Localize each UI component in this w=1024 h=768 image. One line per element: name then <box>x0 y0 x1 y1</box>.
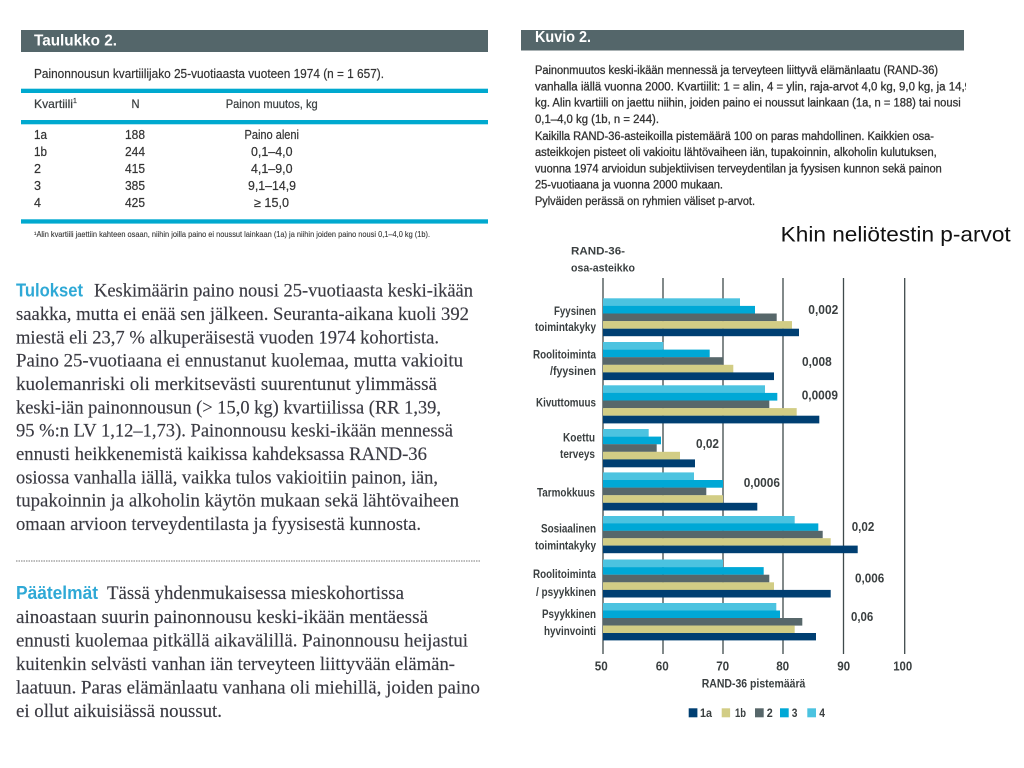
table row 2 <box>34 162 293 176</box>
heading: Tulokset: Tulokset <box>16 280 83 300</box>
conclusions paragraph: laatuun. Paras elämänlaatu vanhana oli miehillä, joiden paino <box>16 678 480 698</box>
panel: figure 2 heading bar: Kuvio 2. <box>535 29 591 46</box>
group: Roolitoiminta / fyysinen <box>533 342 832 380</box>
group: Kivuttomuus <box>536 385 838 423</box>
table row 3: 385 <box>125 179 145 193</box>
figure description: Painonmuutos keski-ikään mennessä ja terveyteen liittyvä elämänlaatu (RAND-36) <box>535 65 938 77</box>
group: Psyykkinen hyvinvointi: Psyykkinen <box>542 609 596 621</box>
group: Sosiaalinen toimintakyky: Sosiaalinen <box>541 524 596 536</box>
conclusions paragraph: kuitenkin selvästi vanhan iän terveyteen liittyvään elämän- <box>16 655 455 675</box>
group: Roolitoiminta / psyykkinen <box>533 560 884 599</box>
table row 3: 3 <box>34 179 41 193</box>
table footnote: ¹Alin kvartiili jaettiin kahteen osaan, niihin joilla paino ei noussut lainkaan (1a) ja niihin joiden paino nousi 0,1–4,0 kg (1b). <box>34 230 430 239</box>
table row 1a <box>34 128 299 142</box>
bar chart: RAND-36 scores <box>533 245 912 720</box>
group: Roolitoiminta / psyykkinen: 0,006 <box>855 572 884 586</box>
group: Psyykkinen hyvinvointi: 0,06 <box>851 610 873 624</box>
table row 1b <box>34 145 293 159</box>
x axis tick labels: 50 <box>595 658 608 673</box>
table row 4 <box>34 196 289 210</box>
legend: 2 <box>767 708 773 720</box>
figure description: vanhalla iällä vuonna 2000. Kvartiilit: 1 = alin, 4 = ylin, raja-arvot 4,0 kg, 9,0 kg, ja 14,9 <box>535 82 971 94</box>
table header row <box>34 97 318 111</box>
table rules <box>21 89 488 224</box>
group: Tarmokkuus: 0,0006 <box>744 476 780 490</box>
figure description: 25-vuotiaana ja vuonna 2000 mukaan. <box>535 180 723 192</box>
x axis tick labels: 100 <box>893 658 912 673</box>
table row 1a: Paino aleni <box>244 128 299 142</box>
table row 1b: 244 <box>125 145 145 159</box>
panel: table 2 <box>21 30 488 239</box>
x axis tick labels: 80 <box>776 658 789 673</box>
results paragraph: Keskimäärin paino nousi 25-vuotiaasta keski-ikään <box>94 282 473 302</box>
group: Fyysinen toimintakyky: toimintakyky <box>535 322 597 334</box>
figure description <box>535 65 971 208</box>
x axis tick labels: 90 <box>837 658 850 673</box>
group: Fyysinen toimintakyky: 0,002 <box>808 303 838 317</box>
table row 4: 4 <box>34 196 41 210</box>
table heading bar: Taulukko 2. <box>34 32 117 50</box>
table heading bar <box>21 30 488 52</box>
group: Sosiaalinen toimintakyky: toimintakyky <box>535 540 597 552</box>
group: Koettu terveys: 0,02 <box>696 437 719 451</box>
group: Koettu terveys: terveys <box>560 449 595 461</box>
group: Koettu terveys: Koettu <box>563 433 595 445</box>
group: Roolitoiminta / fyysinen: /fyysinen <box>550 366 596 378</box>
group: Sosiaalinen toimintakyky: 0,02 <box>852 520 874 534</box>
results paragraph: osiossa vanhalla iällä, vaikka tulos vakioitiin painon, iän, <box>16 468 438 488</box>
table header row: Painon muutos, kg <box>226 97 318 111</box>
results paragraph: 95 %:n LV 1,12–1,73). Painonnousu keski-ikään mennessä <box>16 422 453 442</box>
group: Fyysinen toimintakyky: Fyysinen <box>554 306 596 318</box>
x axis title: RAND-36 pistemäärä <box>702 679 806 691</box>
x axis tick labels <box>595 658 912 673</box>
results paragraph <box>16 282 473 535</box>
group: Psyykkinen hyvinvointi <box>542 603 873 640</box>
results paragraph: miestä eli 23,7 % alkuperäisestä vuoden 1974 kohortista. <box>16 328 439 348</box>
group: Koettu terveys <box>560 429 719 467</box>
table caption: Painonnousun kvartiilijako 25-vuotiaasta vuoteen 1974 (n = 1 657). <box>34 67 384 81</box>
table row 4: ≥ 15,0 <box>254 196 289 210</box>
figure description: 0,1–4,0 kg (1b, n = 244). <box>535 114 659 126</box>
results paragraph: Paino 25-vuotiaana ei ennustanut kuolemaa, mutta vakioitu <box>16 352 463 372</box>
group: Roolitoiminta / fyysinen: Roolitoiminta <box>533 350 597 362</box>
legend: 4 <box>819 708 826 720</box>
table row 2: 415 <box>125 162 145 176</box>
figure description: Pylväiden perässä on ryhmien väliset p-arvot. <box>535 196 755 208</box>
y axis title <box>571 245 635 275</box>
group: Tarmokkuus <box>537 472 780 510</box>
table row 1b: 1b <box>34 145 47 159</box>
table row 1b: 0,1–4,0 <box>251 145 293 159</box>
y axis title: osa-asteikko <box>571 263 635 275</box>
text block: Päätelmät <box>16 583 480 722</box>
group: Kivuttomuus: 0,0009 <box>802 388 838 402</box>
results paragraph: saakka, mutta ei enää sen jälkeen. Seuranta-aikana kuoli 392 <box>16 305 469 325</box>
legend: 1b <box>735 708 746 720</box>
results paragraph: tupakoinnin ja alkoholin käytön mukaan sekä lähtövaiheen <box>16 492 459 512</box>
heading: Päätelmät: Päätelmät <box>16 583 98 603</box>
group: Roolitoiminta / psyykkinen: / psyykkinen <box>536 587 596 599</box>
x axis tick labels: 70 <box>716 658 729 673</box>
results paragraph: omaan arvioon terveydentilasta ja fyysisestä kunnosta. <box>16 515 421 535</box>
results paragraph: ennusti heikkenemistä kaikissa kahdeksassa RAND-36 <box>16 445 427 465</box>
table row 1a: 1a <box>34 128 47 142</box>
table header row: 1 <box>73 98 77 105</box>
results paragraph: keski-iän painonnousun (> 15,0 kg) kvartiilissa (RR 1,39, <box>16 398 441 418</box>
group: Psyykkinen hyvinvointi: hyvinvointi <box>544 626 596 638</box>
conclusions paragraph: ei ollut aikuisiässä noussut. <box>16 702 222 722</box>
legend: 1a <box>700 708 713 720</box>
text block: Tulokset <box>16 280 473 535</box>
legend: 3 <box>792 708 797 720</box>
figure description: asteikkojen pisteet oli vakioitu lähtövaiheen iän, tupakoinnin, alkoholin kulutuksen, <box>535 147 937 159</box>
conclusions paragraph: ainoastaan suurin painonnousu keski-ikään mentäessä <box>16 608 428 628</box>
y axis title: RAND-36- <box>571 245 625 257</box>
results paragraph: kuolemanriski oli merkitsevästi suurentunut ylimmässä <box>16 375 437 395</box>
table header row: Kvartiili <box>34 97 73 111</box>
figure description: vuonna 1974 arvioidun subjektiivisen terveydentilan ja fyysisen kunnon sekä painon <box>535 164 942 176</box>
group: Roolitoiminta / psyykkinen: Roolitoiminta <box>533 569 597 581</box>
callout: Khin neliötestin p-arvot: Khin neliötestin p-arvot <box>781 222 1011 246</box>
group: Fyysinen toimintakyky <box>535 298 838 336</box>
table row 2: 2 <box>34 162 41 176</box>
conclusions paragraph: Tässä yhdenmukaisessa mieskohortissa <box>107 584 404 604</box>
figure description: Kaikilla RAND-36-asteikoilla pistemäärä 100 on paras mahdollinen. Kaikkien osa- <box>535 131 934 143</box>
conclusions paragraph <box>16 584 480 722</box>
table row 1a: 188 <box>125 128 145 142</box>
table row 2: 4,1–9,0 <box>251 162 293 176</box>
group: Sosiaalinen toimintakyky <box>535 516 874 553</box>
group: Tarmokkuus: Tarmokkuus <box>537 488 595 500</box>
figure description: kg. Alin kvartiili on jaettu niihin, joiden paino ei noussut lainkaan (1a, n = 188) tai nousi <box>535 98 961 110</box>
table row 3 <box>34 179 296 193</box>
group: Kivuttomuus: Kivuttomuus <box>536 398 596 410</box>
table header row: N <box>132 97 140 111</box>
table row 3: 9,1–14,9 <box>248 179 296 193</box>
group: Roolitoiminta / fyysinen: 0,008 <box>802 355 832 369</box>
panel: figure 2 heading bar <box>521 29 964 50</box>
conclusions paragraph: ennusti kuolemaa pitkällä aikavälillä. Painonnousu heijastui <box>16 632 468 652</box>
legend <box>689 708 826 720</box>
table row 4: 425 <box>125 196 145 210</box>
x axis tick labels: 60 <box>656 658 669 673</box>
